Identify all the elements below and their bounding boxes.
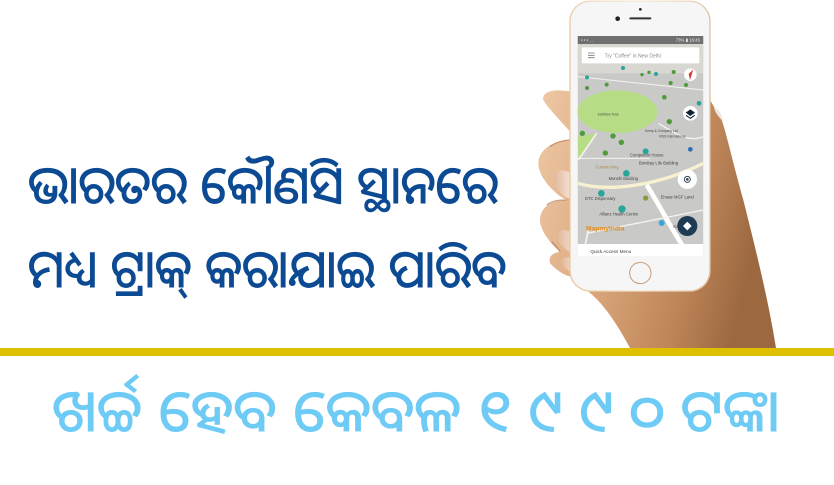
heading line 1: ଭାରତର କୌଣସି ସ୍ଥାନରେ [28,157,498,215]
map labels: Bombay Life Building [639,161,679,166]
illustration: hand holding phone with map app [538,0,776,348]
quick access menu: Quick Access Menu [590,249,632,254]
phone [569,1,711,292]
map labels: Munshi Building [609,176,639,181]
hand [538,90,776,348]
heading line 2: ମଧ୍ୟ ଟ୍ରାକ୍ କରାଯାଇ ପାରିବ [28,241,506,299]
status bar: ▪ ▪ ▪ ... [581,38,593,43]
nail: finger 4 [562,257,586,276]
map buttons [677,68,698,236]
phone body [569,1,711,292]
map labels: DTC Dispensary [585,196,616,201]
map pins [580,66,701,226]
search bar: Try "Coffee" in New Delhi [605,53,661,59]
map labels: Competent House [630,153,664,158]
nail: thumb [714,107,723,122]
map labels: Allianz Health Centre [599,212,639,217]
nail: finger 3 [557,230,587,257]
map labels: Cuisine King [595,165,619,170]
park [577,90,657,133]
status bar: 73% ▮ 16:45 [676,38,701,43]
status bar [578,36,703,44]
nail: finger 2 [554,170,580,198]
map labels: MapmyIndia [586,226,625,233]
finger creases [547,140,572,252]
map labels: Emaar MGF Land [661,195,694,200]
map labels: Kasturba [673,224,691,229]
home button [630,262,651,284]
price line: ଖର୍ଚ୍ଚ ହେବ କେବଳ ୧ ୯ ୯ ୦ ଟଙ୍କା [52,379,780,444]
map labels: RSS International [659,134,686,138]
map labels: Kemp & Company Ltd [645,129,678,133]
search bar [582,47,699,63]
yellow divider bar [0,348,834,356]
map labels: Jodhfore Tone [598,113,619,117]
camera, speaker [615,8,651,21]
quick access menu [578,244,703,256]
map labels [585,113,694,233]
roads [578,77,703,253]
screen [577,36,703,256]
